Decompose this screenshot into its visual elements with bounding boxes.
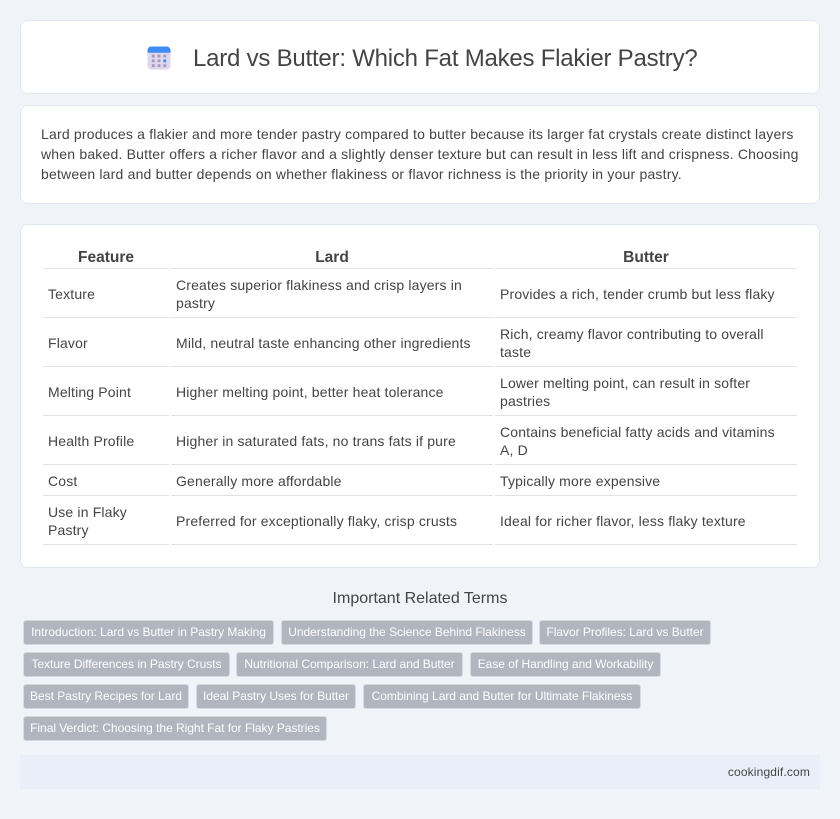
icon: calendar grid [147,46,171,70]
comparison table panel: Cost [48,473,77,489]
comparison table panel: Typically more expensive [500,473,660,489]
intro paragraph [41,126,799,182]
comparison table panel: pastries [500,393,550,409]
row: health profile [48,424,775,458]
comparison table panel: Flavor [48,335,88,351]
row: cost [48,473,660,489]
footer site name: cookingdif.com [728,765,810,779]
related terms tags: Nutritional Comparison: Lard and Butter [244,657,455,671]
comparison table panel: Mild, neutral taste enhancing other ingredients [176,335,471,351]
intro text panel [20,105,820,204]
table header: butter: Butter [623,249,669,266]
related terms tags: Texture Differences in Pastry Crusts [31,657,222,671]
comparison table panel [20,224,820,568]
related terms tags: Ease of Handling and Workability [478,657,653,671]
intro paragraph: between lard and butter depends on whether flakiness or flavor richness is the priority in your pastry. [41,166,682,182]
heading: important related terms: Important Related Terms [333,590,507,607]
comparison table panel: Use in Flaky [48,504,127,520]
comparison table panel: Contains beneficial fatty acids and vitamins [500,424,775,440]
related terms tags: Understanding the Science Behind Flakiness [288,625,526,639]
comparison table panel: Pastry [48,522,89,538]
footer bar [20,755,820,789]
row: melting point [48,375,750,409]
related terms tags: Flavor Profiles: Lard vs Butter [546,625,704,639]
related terms tags: Combining Lard and Butter for Ultimate Flakiness [372,689,632,703]
table header: feature: Feature [78,249,134,266]
intro paragraph: when baked. Butter offers a richer flavor and a slightly denser texture but can result in less lift and crispness. Choosing [41,146,799,162]
comparison table panel: Creates superior flakiness and crisp layers in [176,277,462,293]
related terms tags: Best Pastry Recipes for Lard [30,689,182,703]
comparison table panel: Lower melting point, can result in softer [500,375,750,391]
related terms tags: Final Verdict: Choosing the Right Fat for Flaky Pastries [30,721,320,735]
comparison table panel: Higher melting point, better heat tolerance [176,384,444,400]
row: use in flaky pastry [48,504,746,538]
related terms tags: Ideal Pastry Uses for Butter [203,689,349,703]
comparison table panel: Higher in saturated fats, no trans fats if pure [176,433,456,449]
comparison table panel: pastry [176,295,215,311]
comparison table panel: A, D [500,442,528,458]
comparison table panel: Rich, creamy flavor contributing to overall [500,326,764,342]
comparison table panel: Ideal for richer flavor, less flaky texture [500,513,746,529]
header panel [20,20,820,94]
comparison table panel: Provides a rich, tender crumb but less flaky [500,286,775,302]
table header: lard: Lard [315,249,349,266]
comparison table panel: Texture [48,286,95,302]
comparison table panel: Generally more affordable [176,473,342,489]
comparison table panel: Health Profile [48,433,134,449]
title: Lard vs Butter: Which Fat Makes Flakier Pastry? [193,45,698,72]
comparison table panel: taste [500,344,531,360]
comparison table panel: Preferred for exceptionally flaky, crisp crusts [176,513,457,529]
intro paragraph: Lard produces a flakier and more tender pastry compared to butter because its larger fat crystals create distinct layers [41,126,794,142]
related terms tags [23,620,711,741]
row: texture [48,277,775,311]
comparison table panel: Melting Point [48,384,131,400]
related terms tags: Introduction: Lard vs Butter in Pastry Making [31,625,266,639]
row: flavor [48,326,764,360]
